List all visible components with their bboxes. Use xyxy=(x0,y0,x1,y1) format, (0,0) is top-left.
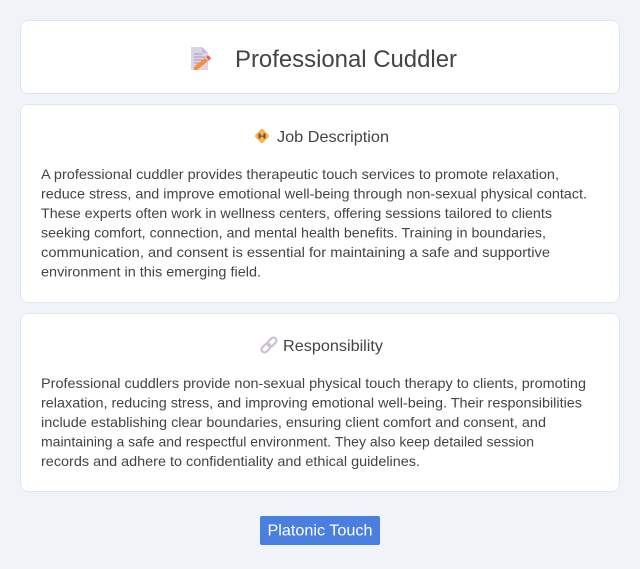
tag button: platonic touch xyxy=(260,516,380,545)
icon: diamond sign xyxy=(254,128,270,144)
panel: job description xyxy=(20,104,620,303)
title: Professional Cuddler xyxy=(235,46,457,73)
text block: job description: communication, and consent is essential for maintaining a safe and supportive xyxy=(41,244,550,260)
text block: job description: seeking comfort, connection, and mental health benefits. Training in boundaries, xyxy=(41,224,546,240)
text block: responsibility: include establishing clear boundaries, ensuring client comfort and consent, and xyxy=(41,414,546,430)
icon: document with pencil xyxy=(191,47,211,70)
text block: job description: reduce stress, and improve emotional well-being through non-sexual physical contact. xyxy=(41,186,587,202)
heading: job description: Job Description xyxy=(277,129,389,146)
tag button: platonic touch: Platonic Touch xyxy=(268,522,372,540)
text block: responsibility: maintaining a safe and respectful environment. They also keep detailed session xyxy=(41,434,534,450)
text block: responsibility: relaxation, reducing stress, and improving emotional well-being. Their responsibilities xyxy=(41,394,582,410)
panel: responsibility xyxy=(20,313,620,492)
heading: responsibility: Responsibility xyxy=(283,338,383,355)
panel: title xyxy=(20,20,620,94)
text block: responsibility xyxy=(41,375,586,469)
text block: responsibility: records and adhere to confidentiality and ethical guidelines. xyxy=(41,453,420,469)
icon: chain link xyxy=(260,336,278,354)
text block: job description: A professional cuddler provides therapeutic touch services to promote relaxation, xyxy=(41,166,559,182)
text block: job description: These experts often work in wellness centers, offering sessions tailored to clients xyxy=(41,205,552,221)
text block: responsibility: Professional cuddlers provide non-sexual physical touch therapy to clients, promoting xyxy=(41,375,586,391)
text block: job description: environment in this emerging field. xyxy=(41,264,261,280)
text block: job description xyxy=(41,166,587,280)
